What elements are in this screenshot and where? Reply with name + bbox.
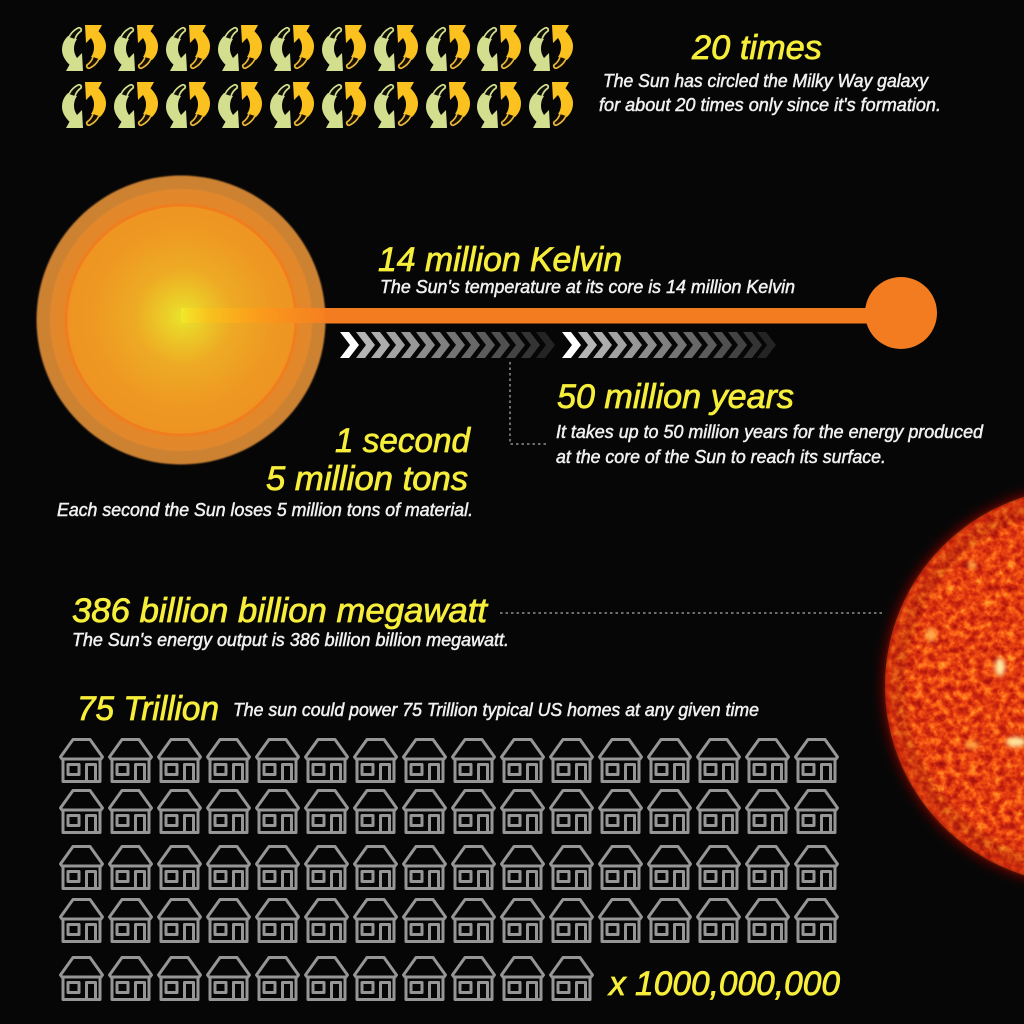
text: energy travel description: It takes up to 50 million years for the energy produced [556,422,984,442]
chart: temperature line from core to marker [325,277,937,349]
text: galaxy orbit description: for about 20 times only since it's formation. [599,95,941,115]
heading: 1 second, 5 million tons: 5 million tons [266,460,468,498]
connector: dotted leader to 50 million years [510,362,546,444]
heading: 75 Trillion: 75 Trillion [77,690,219,728]
icon grid: houses [60,740,838,1000]
connector: dotted line to sun [500,612,884,614]
text: energy travel description: at the core of the Sun to reach its surface. [556,447,886,467]
illustration: sun cross-section with core beam [36,176,326,464]
arrows: chevron row one [340,332,555,358]
heading: 386 billion billion megawatt: 386 billion billion megawatt [72,592,489,630]
text: core temperature description: The Sun's temperature at its core is 14 million Kelvin [380,277,795,297]
text: galaxy orbit description [599,71,941,115]
text: energy output description: The Sun's energy output is 386 billion billion megawatt. [72,630,509,650]
heading: 1 second, 5 million tons [266,422,471,498]
text: homes description: The sun could power 75 Trillion typical US homes at any given time [233,700,759,720]
illustration: photo-like sun surface [883,486,1024,886]
heading: 1 second, 5 million tons: 1 second [335,422,471,460]
text: mass loss description: Each second the Sun loses 5 million tons of material. [57,500,473,520]
heading: 20 times: 20 times [691,29,822,67]
icon grid: orbit arrows, 20 times [62,25,573,128]
heading: 50 million years: 50 million years [557,378,794,416]
text: galaxy orbit description: The Sun has circled the Milky Way galaxy [603,71,929,91]
arrows: chevron row two [562,332,776,358]
text: energy travel description [556,422,984,467]
heading: 14 million Kelvin: 14 million Kelvin [378,241,622,279]
multiplier: x 1000,000,000: x 1000,000,000 [607,965,840,1003]
